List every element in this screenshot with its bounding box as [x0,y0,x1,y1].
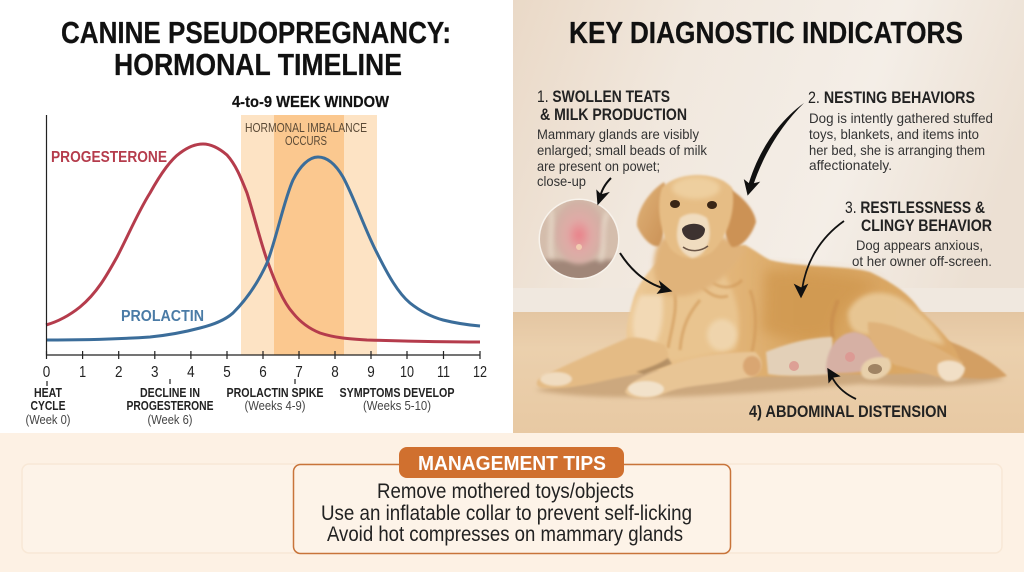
chest ruff [633,262,739,360]
milestone: prolactin spike [226,386,324,413]
arrow: restlessness to flank [795,221,844,297]
callout 1: swollen teats: enlarged; small beads of milk [537,142,708,158]
tips list: Avoid hot compresses on mammary glands [327,523,683,546]
callout 2: nesting behaviors [808,89,993,173]
tips list [321,480,692,546]
axes [46,115,480,386]
axis numbers: 11 [437,364,450,381]
milestone: symptoms develop: (Weeks 5-10) [363,399,431,413]
illustration: golden retriever [535,175,1007,398]
callout 1: swollen teats: Mammary glands are visibly [537,126,699,142]
callout 3: restlessness: CLINGY BEHAVIOR [861,217,992,235]
callout 1: swollen teats: are present on powet; [537,158,660,174]
gap shadow between legs [636,358,672,374]
tips heading pill [399,447,624,478]
right foreleg [625,352,762,398]
flank shading [762,270,880,340]
window caption [245,121,367,148]
progesterone label: PROGESTERONE [51,149,167,166]
body [626,245,961,377]
eyes [670,200,680,208]
callout 2: nesting behaviors: toys, blankets, and items into [809,126,979,142]
arrow: nesting to dog [745,103,804,194]
title: hormonal timeline: CANINE PSEUDOPREGNANCY: [61,15,451,50]
teats [845,352,855,362]
inset: close-up of swollen teat [538,198,620,282]
left paw highlight [540,372,572,386]
title: key diagnostic indicators: KEY DIAGNOSTIC INDICATORS [569,15,963,50]
panel: management tips [294,447,730,554]
neck ruff [654,231,745,296]
axis numbers: 1 [79,364,86,381]
milestone: decline in progesterone: DECLINE IN [140,386,200,400]
chest highlight [707,319,737,351]
tips list: Use an inflatable collar to prevent self-licking [321,502,692,525]
callout 2: nesting behaviors: Dog is intently gathered stuffed [809,110,993,126]
axis numbers: 6 [259,364,267,381]
chest fur streaks [668,275,756,352]
axis numbers: 8 [331,364,339,381]
underbelly [766,337,835,376]
window caption: OCCURS [285,134,327,148]
paw pad [868,364,882,374]
chart: hormone timeline [26,94,487,427]
window caption: HORMONAL IMBALANCE [245,121,367,135]
milestone: prolactin spike: PROLACTIN SPIKE [226,386,324,400]
milestone: decline in progesterone: (Week 6) [148,413,192,427]
milestone: heat cycle: HEAT [34,386,62,400]
tips list: Remove mothered toys/objects [377,480,634,503]
shaded inner window [274,115,344,355]
left panel background [0,0,513,433]
chest cream patch [632,295,663,355]
right paw highlight [628,381,664,397]
hind leg [868,322,963,380]
milestone: decline in progesterone [126,386,214,427]
bottom band background [0,433,1024,572]
left ear [637,182,668,246]
arrow: inset to chest [620,253,671,293]
milestone: symptoms develop [340,386,454,413]
arrow: distension to belly [828,369,856,399]
milestone: symptoms develop: SYMPTOMS DEVELOP [340,386,454,400]
axis numbers: 10 [400,364,414,381]
callout 3: restlessness: Dog appears anxious, [856,237,983,253]
right ear [720,185,756,247]
callout 2: nesting behaviors: her bed, she is arranging them [809,142,985,158]
callout 3: restlessness: 3. RESTLESSNESS & [845,199,985,217]
callout 2: nesting behaviors: affectionately. [809,157,892,173]
axis numbers: 7 [295,364,303,381]
right panel: photo background [513,0,1024,433]
axis numbers: 2 [115,364,123,381]
hip orange edge [832,300,838,338]
title: hormonal timeline: HORMONAL TIMELINE [114,47,402,82]
swollen abdomen [826,332,888,373]
milestone: heat cycle: CYCLE [30,399,66,413]
callout 1: swollen teats: & MILK PRODUCTION [540,106,687,124]
callout 4: abdominal distension: 4) ABDOMINAL DISTENSION [749,403,947,421]
milestone: prolactin spike: (Weeks 4-9) [244,399,306,413]
axis numbers: 12 [473,364,487,381]
axis numbers: 4 [187,364,195,381]
shaded outer window [241,115,377,355]
axis numbers [43,364,487,381]
axis numbers: 0 [43,364,50,381]
floor shadow [535,360,1005,397]
muzzle [677,214,710,258]
tips heading pill: MANAGEMENT TIPS [418,453,606,475]
hind paw [861,357,891,380]
milestone: heat cycle: (Week 0) [26,413,70,427]
milestone: heat cycle [26,386,70,427]
callout 2: nesting behaviors: 2. NESTING BEHAVIORS [808,89,975,107]
axis numbers: 9 [367,364,375,381]
head [659,175,733,258]
callout 1: swollen teats: close-up [537,173,586,189]
elbow [743,356,761,376]
prolactin label: PROLACTIN [121,308,204,325]
callout 1: swollen teats: 1. SWOLLEN TEATS [537,88,670,106]
prolactin curve [46,157,480,340]
callout 3: restlessness: ot her owner off-screen. [852,253,992,269]
window heading: 4-to-9 WEEK WINDOW [232,94,390,111]
nose [682,224,705,240]
mouth [683,246,708,251]
milestone: decline in progesterone: PROGESTERONE [126,399,214,413]
hind foot [937,361,965,381]
hip highlight [848,293,945,345]
left foreleg [537,337,668,388]
panel: faint backing frame [22,464,1002,553]
arrow: text to inset [597,178,611,204]
axis numbers: 5 [223,364,231,381]
tail [925,335,1007,379]
progesterone curve [46,144,480,342]
forehead highlight [672,177,720,199]
callout 3: restlessness [845,199,992,269]
callout 1: swollen teats [537,88,708,189]
title: hormonal timeline [61,15,451,82]
axis numbers: 3 [151,364,159,381]
